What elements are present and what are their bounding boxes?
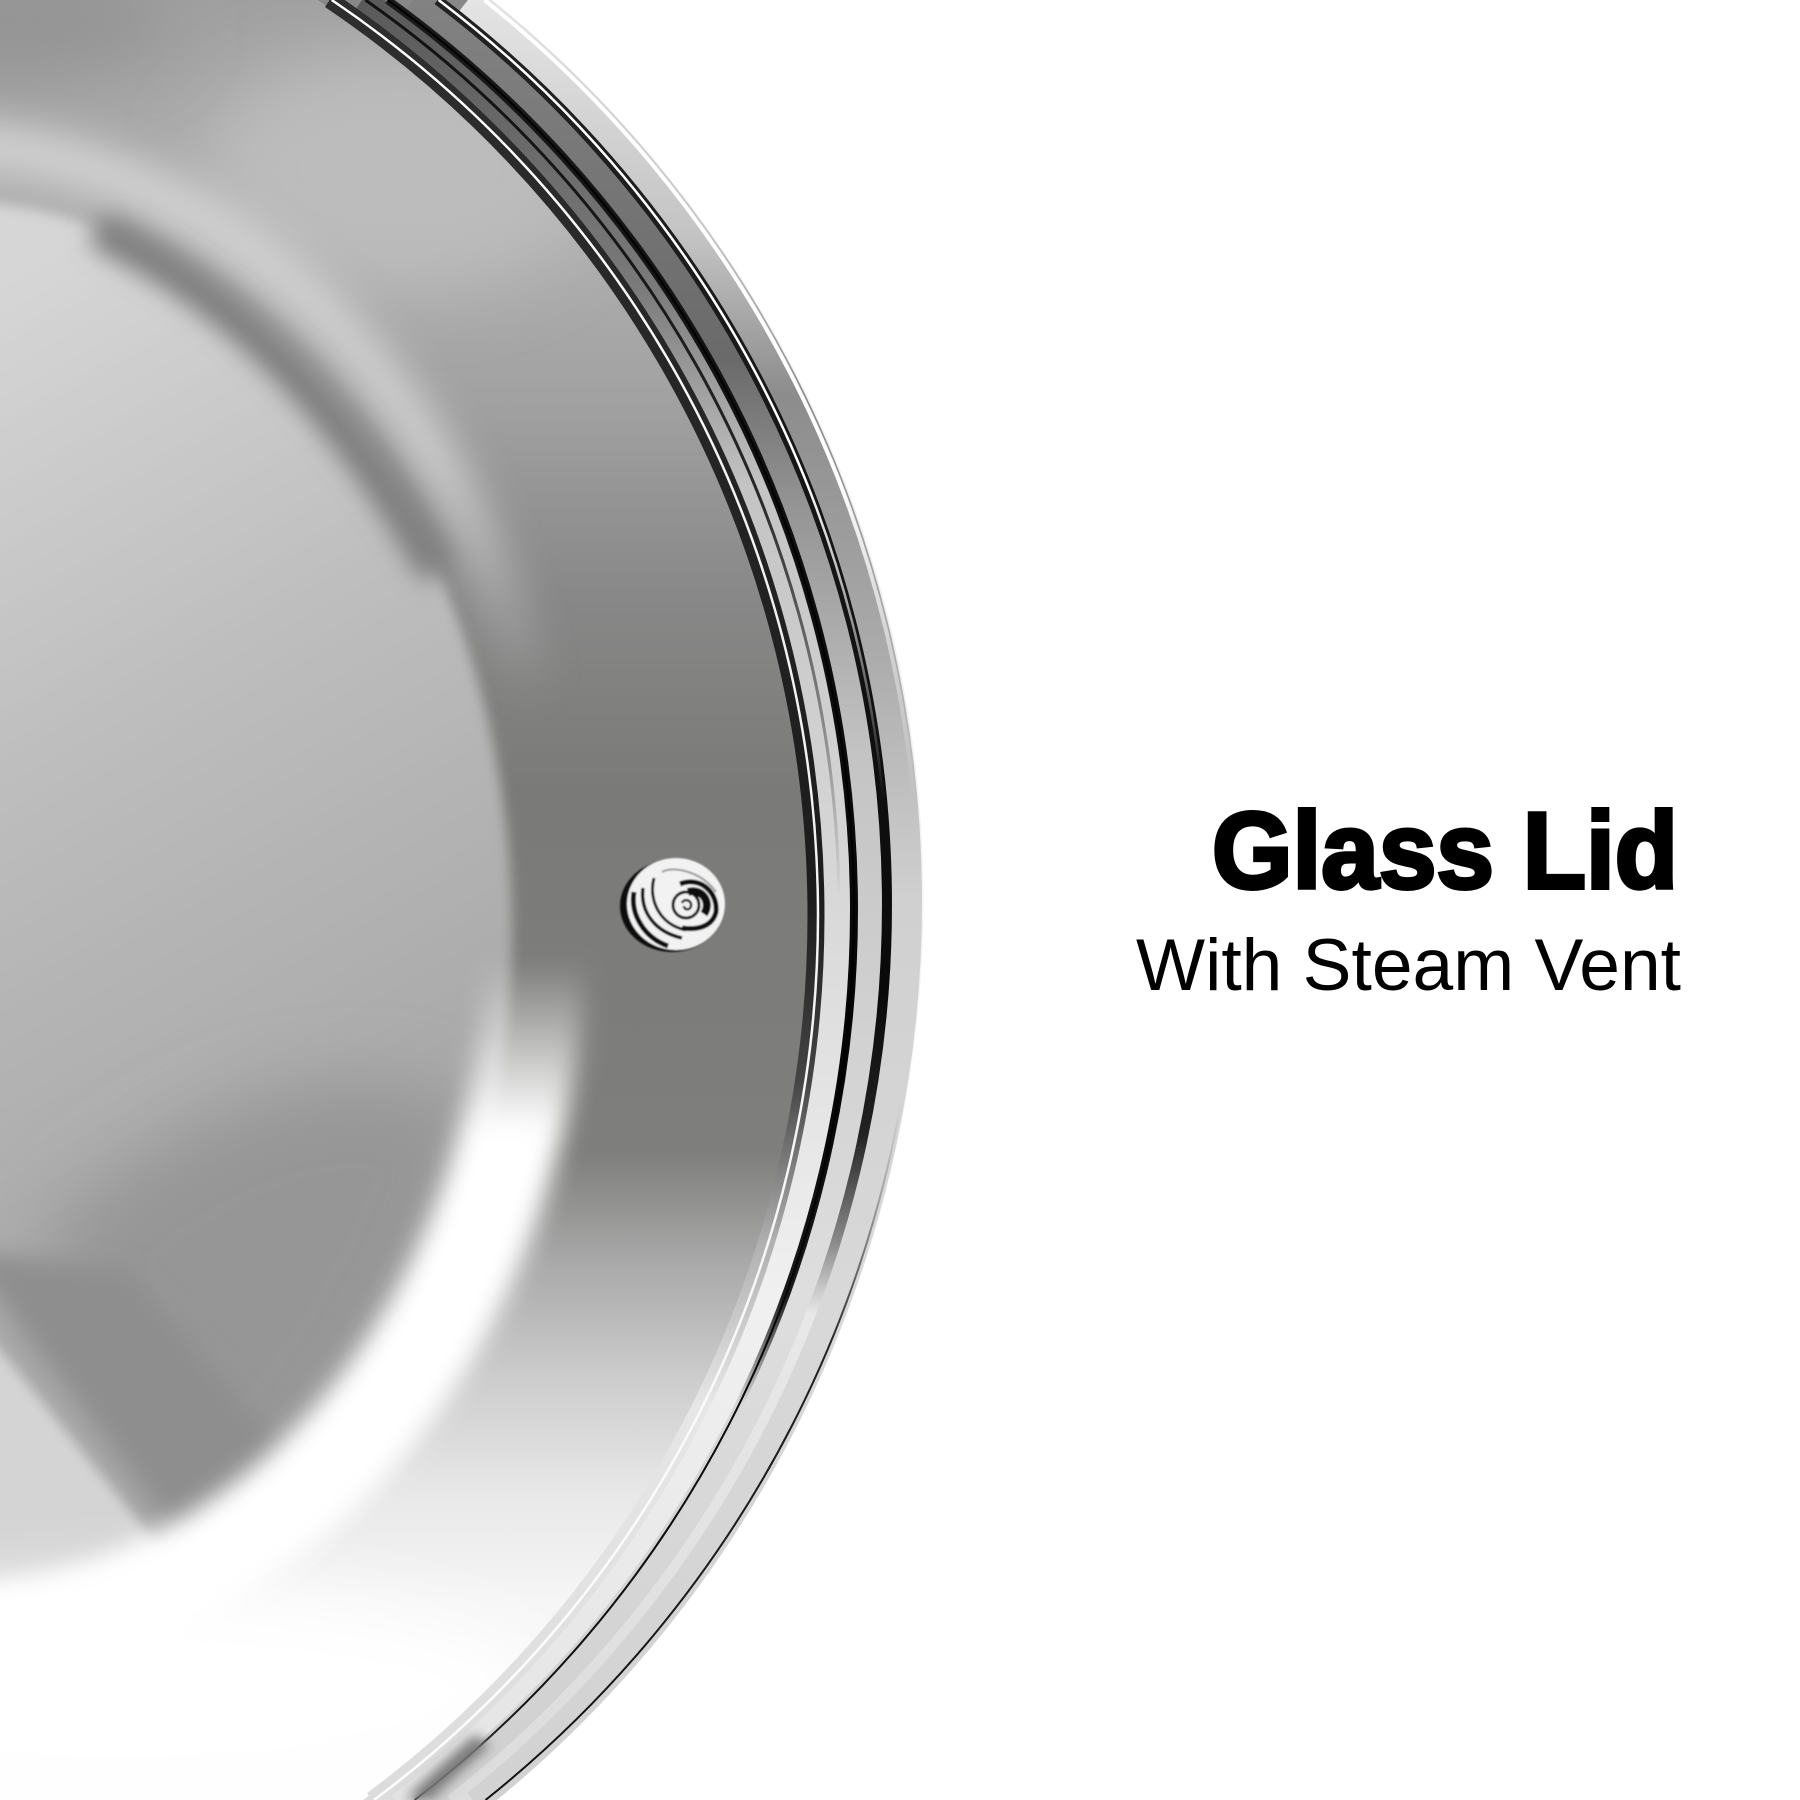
dark top left corner (0, 0, 136, 84)
outer thin dark line bottom (486, 0, 919, 1800)
white highlight band (0, 970, 592, 1633)
lid interior: glass and stainless surface (0, 0, 808, 1620)
rim: concentric stainless rings (317, 0, 922, 1800)
dark arc at disc edge (110, 236, 430, 560)
panel: stainless glass lid photo (0, 0, 1000, 1800)
white lower left surface (0, 1568, 20, 1579)
middle black groove (388, 0, 854, 1800)
outer white edge (490, 0, 922, 1800)
icon: steam vent knob (620, 858, 725, 952)
base disc (0, 200, 512, 1660)
lighter grey left wedge (0, 1342, 153, 1588)
darker wedge edge (0, 1248, 260, 1520)
inner black edge (330, 0, 816, 1800)
light sheen upper right (200, 50, 600, 290)
inner white line (332, 0, 818, 1800)
grime band upper (365, 0, 839, 1800)
inner light band (362, 0, 837, 1800)
white line in outer groove top (439, 0, 888, 1800)
outer black groove (438, 0, 887, 1800)
lower grey wedge in disc (49, 1074, 453, 1436)
outer light band (468, 0, 907, 1800)
subtitle: With Steam Vent: With Steam Vent (1136, 925, 1681, 1006)
band between black lines (413, 0, 870, 1800)
middle thin black line (388, 0, 854, 1800)
upper highlight arc (0, 110, 534, 660)
dark reflection at bottom of rim (405, 1735, 490, 1800)
title: Glass Lid: Glass Lid (1212, 790, 1678, 912)
rim underlay (317, 0, 922, 1800)
outer white highlight top (484, 0, 918, 1800)
